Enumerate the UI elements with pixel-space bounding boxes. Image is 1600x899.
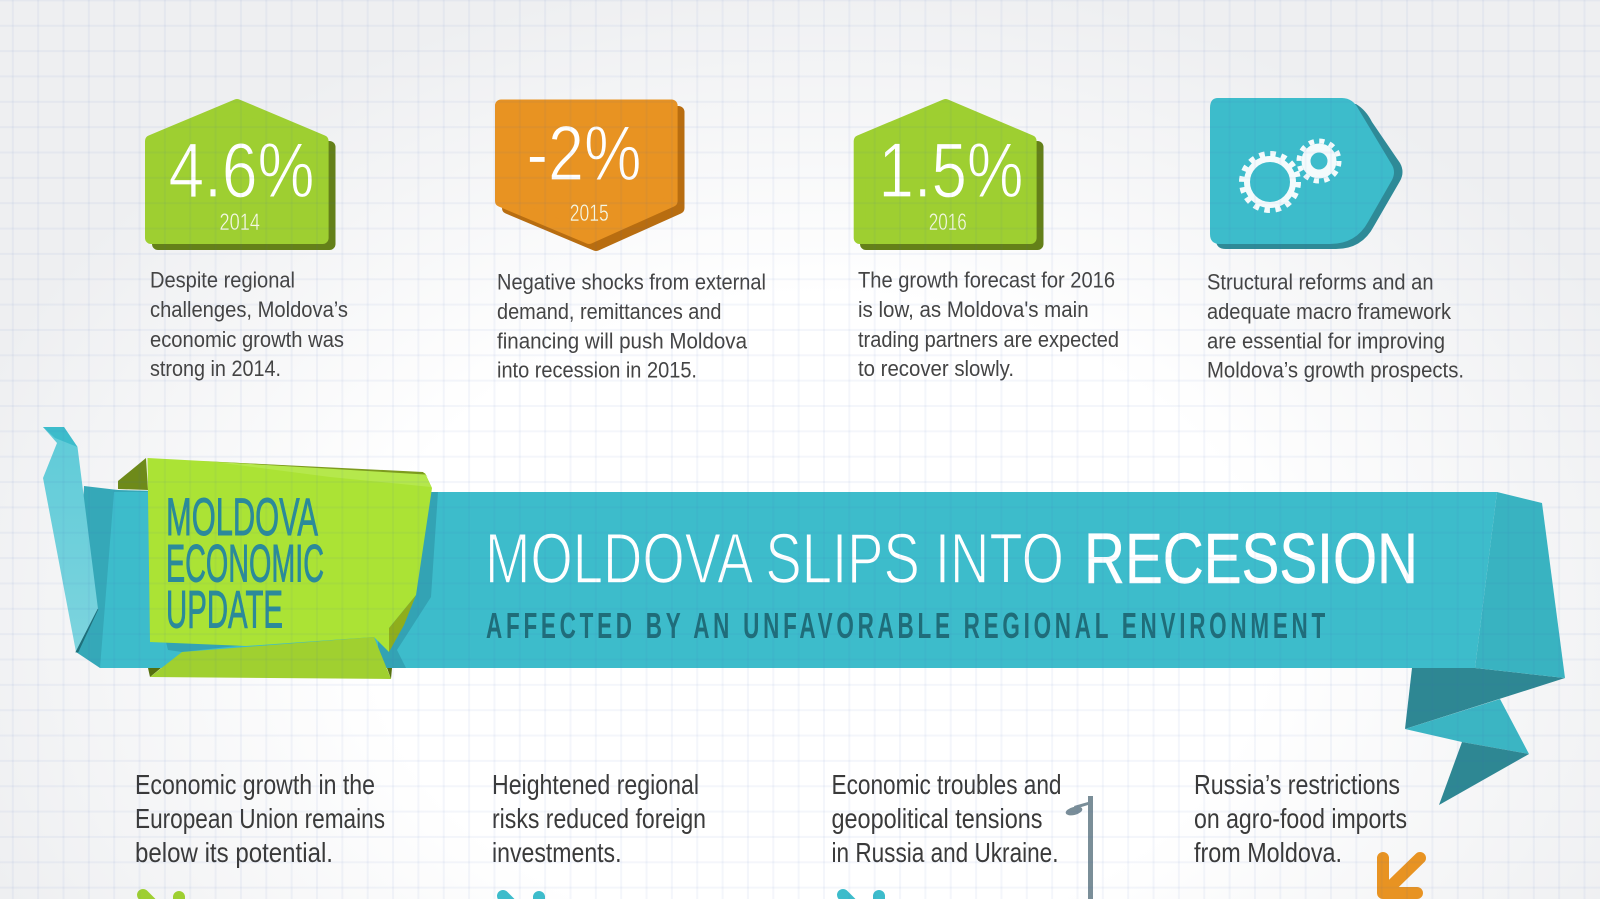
text: agro-food restrictions [1194,769,1407,868]
text: agro-food restrictions: from Moldova. [1194,837,1342,868]
text: reforms description: Moldova’s growth prospects. [1207,358,1464,382]
text: regional risks: Heightened regional [492,769,699,800]
text: Russia and Ukraine [832,769,1062,868]
text: agro-food restrictions: on agro-food imports [1194,803,1407,834]
panel: regional risks [492,769,706,899]
badge: 4.6% 2014: 4.6% [168,126,314,214]
text: agro-food restrictions: Russia’s restrictions [1194,769,1400,800]
panel: 2015 recession [497,106,766,382]
panel: EU growth [135,769,385,899]
text: 2014 description: economic growth was [150,327,344,352]
text: 2015 description: demand, remittances and [497,299,722,324]
text: 2016 description [858,268,1119,381]
title: MOLDOVA SLIPS INTO [485,520,1064,599]
badge: 4.6% 2014 [151,105,330,244]
icon: orange arrow [1383,858,1420,893]
text: 2014 description: challenges, Moldova’s [150,297,348,322]
left ribbon folds [43,427,160,668]
text: 2016 description: The growth forecast for 2016 [858,268,1115,292]
text: 2016 description: to recover slowly. [858,356,1014,381]
banner: green label [118,458,438,679]
text: Russia and Ukraine: geopolitical tensions [832,803,1042,834]
badge: 1.5% 2016 [860,105,1038,244]
icon: green arrow [143,895,179,899]
text: EU growth: below its potential. [135,837,333,868]
icon: small gear [1299,141,1339,181]
text: regional risks: risks reduced foreign [492,803,706,834]
badge: -2% 2015: 2015 [570,200,609,227]
text: 2015 description: Negative shocks from external [497,270,766,294]
label text [166,488,324,640]
badge: 4.6% 2014: 2014 [220,209,260,236]
text: 2016 description: is low, as Moldova's main [858,297,1089,322]
text: EU growth: Economic growth in the [135,769,375,800]
badge: -2% 2015 [501,106,678,245]
text: regional risks: investments. [492,837,622,868]
badge: gears [1210,98,1402,249]
panel: 2016 forecast [858,105,1119,381]
label text: MOLDOVA [166,488,318,547]
title emphasis: RECESSION [1084,520,1418,599]
text: 2014 description: strong in 2014. [150,356,281,381]
label text: ECONOMIC [166,534,324,594]
panel: 2014 growth [150,105,348,381]
text: reforms description: are essential for improving [1207,328,1445,354]
right ribbon fold and tail [1405,492,1565,805]
text: 2015 description: into recession in 2015. [497,358,697,382]
panel: structural reforms [1207,98,1464,382]
icon: large gear [1242,154,1298,210]
text: 2015 description [497,270,766,382]
text: Russia and Ukraine: Economic troubles and [832,769,1062,800]
panel: Russia and Ukraine [832,769,1093,899]
banner: teal ribbon [43,427,1565,805]
label text: UPDATE [166,580,283,640]
main ribbon [100,492,1497,668]
text: reforms description [1207,270,1464,382]
text: Russia and Ukraine: in Russia and Ukraine. [832,837,1058,868]
badge: 1.5% 2016: 1.5% [878,126,1024,214]
panel: agro-food restrictions [1194,769,1420,893]
text: 2014 description: Despite regional [150,268,295,292]
icon: street lamp [1065,796,1093,899]
text: 2016 description: trading partners are expected [858,327,1119,352]
text: EU growth: European Union remains [135,803,385,834]
icon: teal arrow [503,896,539,899]
text: 2014 description [150,268,348,381]
text: regional risks [492,769,706,868]
text: reforms description: adequate macro framework [1207,299,1452,324]
text: EU growth [135,769,385,868]
text: 2015 description: financing will push Moldova [497,328,747,354]
icon: teal arrow [843,895,879,899]
badge: 1.5% 2016: 2016 [929,209,967,236]
text: reforms description: Structural reforms and an [1207,270,1434,294]
badge: -2% 2015: -2% [526,109,642,197]
